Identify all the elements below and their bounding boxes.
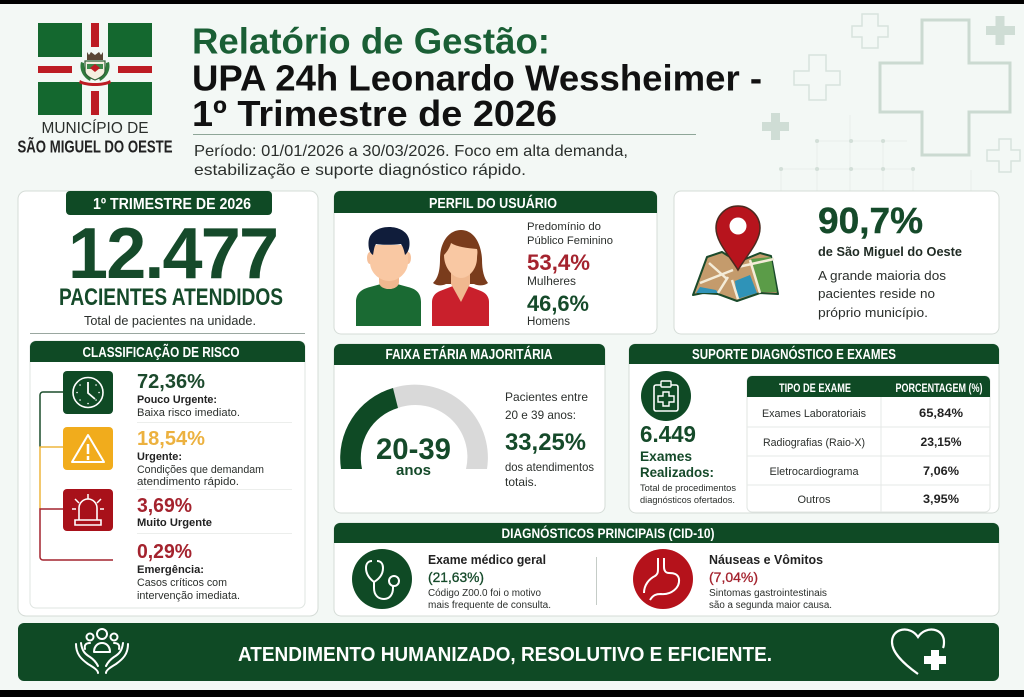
icon: siren xyxy=(63,489,113,531)
heading: diagnostic support xyxy=(629,344,999,364)
icon: man xyxy=(356,227,421,326)
risk: urgente: Urgente: xyxy=(137,451,182,463)
text: predominance: Predomínio do xyxy=(527,221,601,233)
heading: user profile xyxy=(334,191,657,213)
icon: clock xyxy=(63,371,113,414)
municipality name: MUNICÍPIO DE xyxy=(42,118,148,137)
text: age stat xyxy=(505,390,594,489)
title: UPA 24h Leonardo Wessheimer - xyxy=(192,58,762,98)
title xyxy=(192,20,762,135)
stat: men xyxy=(527,291,589,328)
table: exam types: TIPO DE EXAME xyxy=(779,383,851,395)
risk: urgente: atendimento rápido. xyxy=(137,476,239,488)
risk: pouco urgente: Baixa risco imediato. xyxy=(137,407,240,419)
text: nausea: Sintomas gastrointestinais xyxy=(709,588,827,599)
table: exam types: 23,15% xyxy=(920,435,962,449)
sub-panel: risk classification xyxy=(30,341,305,608)
municipality name xyxy=(18,118,172,156)
icon: people in hands xyxy=(76,629,128,673)
period text: estabilização e suporte diagnóstico rápido. xyxy=(194,162,526,179)
panel: diagnostic support xyxy=(629,344,999,513)
tag: quarter xyxy=(66,191,272,215)
text: nausea: (7,04%) xyxy=(709,569,758,585)
text: predominance: Público Feminino xyxy=(527,235,613,247)
table: exam types: Eletrocardiograma xyxy=(770,466,859,478)
stat: men: 46,6% xyxy=(527,291,589,316)
risk: muito urgente: Muito Urgente xyxy=(137,517,212,529)
stat: women xyxy=(527,250,590,288)
risk: emergência: Emergência: xyxy=(137,564,204,576)
risk: emergência: intervenção imediata. xyxy=(137,590,240,602)
footer slogan: ATENDIMENTO HUMANIZADO, RESOLUTIVO E EFICIENTE. xyxy=(238,644,772,666)
stat: men: Homens xyxy=(527,316,570,328)
tag: quarter: 1º TRIMESTRE DE 2026 xyxy=(93,196,251,213)
heading: age range: FAIXA ETÁRIA MAJORITÁRIA xyxy=(386,346,553,363)
heading: diagnostic support: SUPORTE DIAGNÓSTICO E EXAMES xyxy=(692,345,896,363)
risk: emergência xyxy=(137,541,240,602)
title: Relatório de Gestão: xyxy=(192,20,550,62)
panel: total patients and risk xyxy=(18,191,318,616)
text: nausea: Náuseas e Vômitos xyxy=(709,553,823,567)
text: nausea: são a segunda maior causa. xyxy=(709,600,832,611)
text: age stat: Pacientes entre xyxy=(505,390,588,404)
risk: urgente xyxy=(137,428,264,488)
stat: residents: 90,7% xyxy=(818,200,923,241)
heading: risk classification: CLASSIFICAÇÃO DE RISCO xyxy=(82,343,240,361)
panel: age range xyxy=(334,344,605,513)
text: general exam xyxy=(428,553,551,611)
text: nausea xyxy=(709,553,832,611)
table: exam types: Radiografias (Raio-X) xyxy=(763,437,865,449)
label: patients attended: PACIENTES ATENDIDOS xyxy=(59,284,283,311)
icon: warning xyxy=(63,427,113,470)
table: exam types xyxy=(747,376,990,512)
stat: exams: Exames xyxy=(640,448,692,464)
risk: pouco urgente: 72,36% xyxy=(137,371,205,393)
stat: women: Mulheres xyxy=(527,276,576,288)
icon: woman xyxy=(432,230,489,326)
text: age stat: dos atendimentos xyxy=(505,460,594,474)
heading: main diagnoses: DIAGNÓSTICOS PRINCIPAIS (CID-10) xyxy=(502,524,714,541)
connector lines xyxy=(40,392,113,560)
panel: residence xyxy=(674,191,999,334)
gauge chart: anos xyxy=(396,462,431,479)
title: 1º Trimestre de 2026 xyxy=(192,93,557,134)
stat: exams xyxy=(640,421,737,505)
stat: exams: Total de procedimentos xyxy=(640,483,737,493)
icon: map with pin xyxy=(693,206,778,301)
text: residents description: próprio município. xyxy=(818,305,928,320)
icon: stethoscope xyxy=(352,549,412,609)
heading: user profile: PERFIL DO USUÁRIO xyxy=(429,195,557,212)
gauge chart xyxy=(340,385,488,479)
stat: exams: diagnósticos ofertados. xyxy=(640,495,735,505)
big number: patients: 12.477 xyxy=(68,214,279,294)
text: residents description: A grande maioria dos xyxy=(818,268,947,283)
municipal logo xyxy=(38,23,152,115)
gauge chart: 20-39 xyxy=(376,433,451,466)
stat: exams: Realizados: xyxy=(640,464,714,480)
icon: heart with plus xyxy=(892,630,946,674)
text: general exam: (21,63%) xyxy=(428,569,484,585)
text: age stat: 20 e 39 anos: xyxy=(505,408,576,422)
panel: user profile xyxy=(334,191,657,334)
text: general exam: Exame médico geral xyxy=(428,553,546,567)
label: residents: de São Miguel do Oeste xyxy=(818,244,962,259)
text: residents description: pacientes reside no xyxy=(818,286,935,301)
text: general exam: mais frequente de consulta. xyxy=(428,600,551,611)
table: exam types: PORCENTAGEM (%) xyxy=(896,383,983,395)
table: exam types: 65,84% xyxy=(919,406,963,420)
risk: emergência: 0,29% xyxy=(137,541,192,563)
heading: main diagnoses xyxy=(334,523,999,543)
footer banner xyxy=(18,623,999,681)
table: exam types: 7,06% xyxy=(923,464,959,478)
text: age stat: 33,25% xyxy=(505,429,586,456)
table: exam types: 3,95% xyxy=(923,492,959,506)
text: age stat: totais. xyxy=(505,475,537,489)
table: exam types: Outros xyxy=(798,494,831,506)
risk: emergência: Casos críticos com xyxy=(137,577,227,589)
risk: urgente: 18,54% xyxy=(137,428,205,450)
risk: pouco urgente: Pouco Urgente: xyxy=(137,394,217,406)
risk: muito urgente: 3,69% xyxy=(137,495,192,517)
caption: total patients: Total de pacientes na unidade. xyxy=(84,314,256,328)
table: exam types: Exames Laboratoriais xyxy=(762,408,866,420)
icon: stomach xyxy=(633,549,693,609)
text: residents description xyxy=(818,268,947,320)
stat: women: 53,4% xyxy=(527,250,590,275)
period text: Período: 01/01/2026 a 30/03/2026. Foco em alta demanda, xyxy=(194,143,628,160)
municipality name: SÃO MIGUEL DO OESTE xyxy=(18,136,172,156)
risk: muito urgente xyxy=(137,495,212,529)
period text xyxy=(194,143,628,179)
text: predominance xyxy=(527,221,613,247)
text: general exam: Código Z00.0 foi o motivo xyxy=(428,588,541,599)
panel: main diagnoses xyxy=(334,523,999,616)
icon: clipboard xyxy=(641,371,691,421)
risk: urgente: Condições que demandam xyxy=(137,464,264,476)
risk: pouco urgente xyxy=(137,371,240,419)
stat: exams: 6.449 xyxy=(640,421,696,447)
heading: risk classification xyxy=(30,341,305,362)
heading: age range xyxy=(334,344,605,365)
